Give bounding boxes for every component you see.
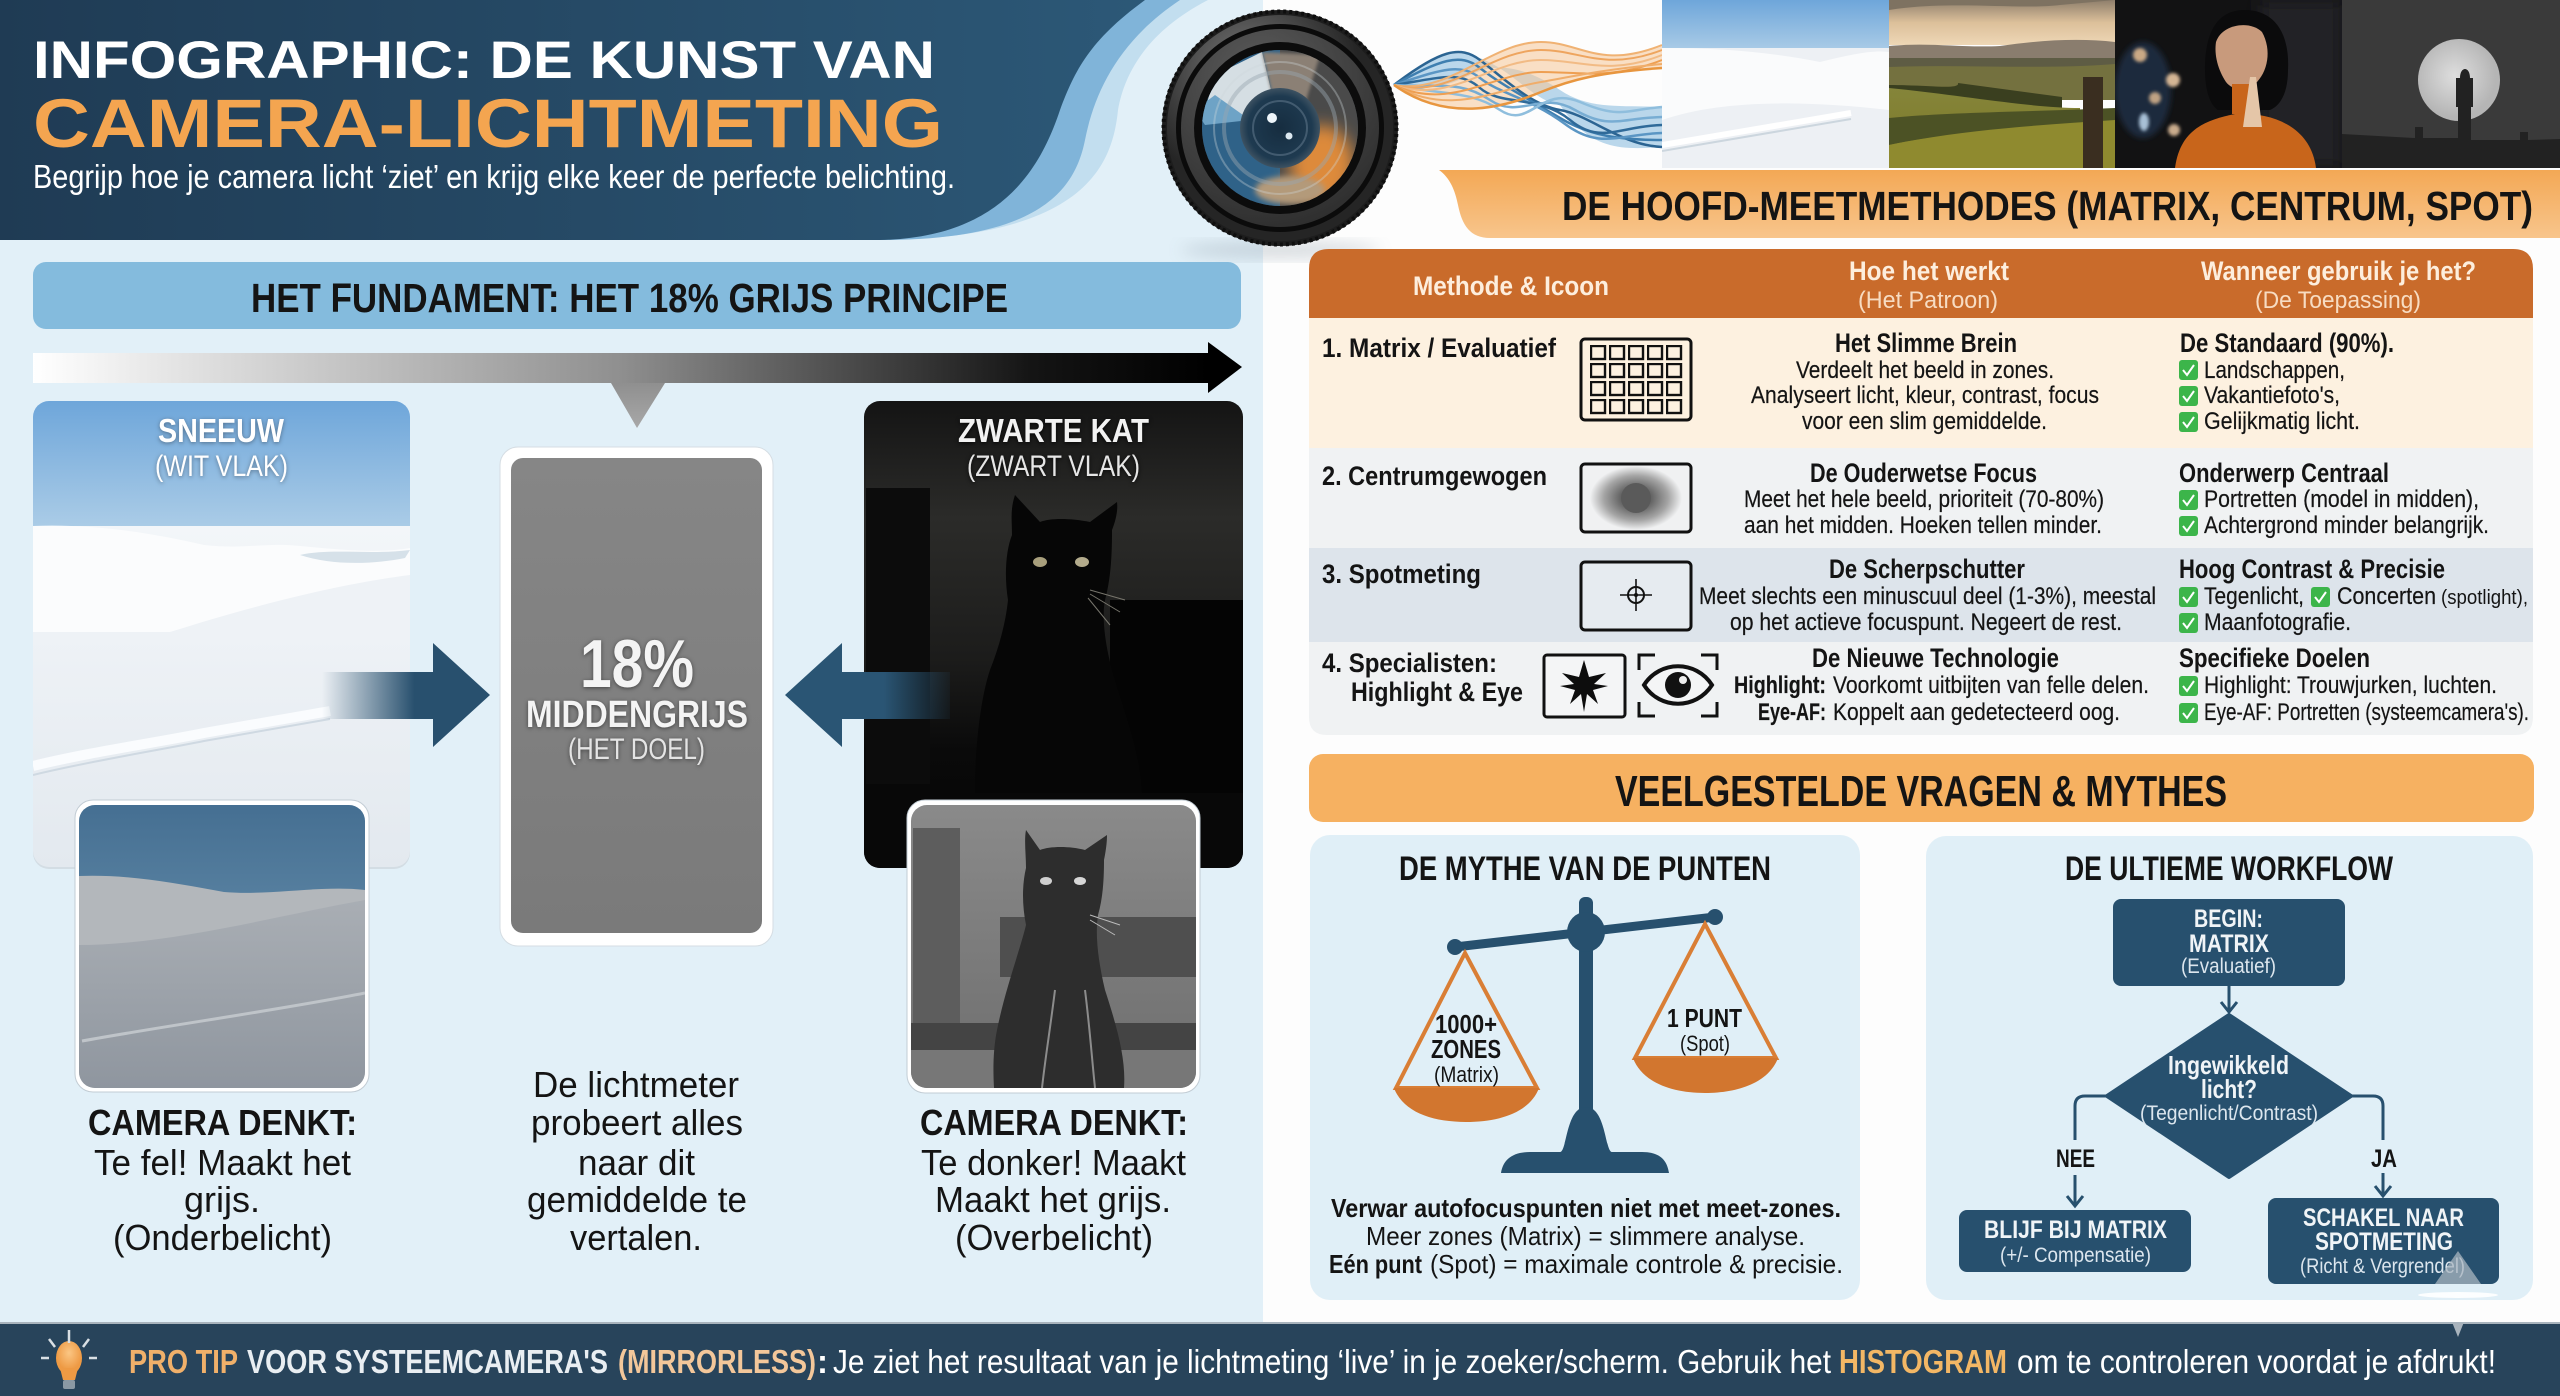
title line 2: CAMERA-LICHTMETING [33, 85, 943, 162]
panel: 18% middengrijs: MIDDENGRIJS [526, 694, 748, 736]
title line 1: INFOGRAPHIC: DE KUNST VAN [33, 31, 935, 90]
text block: camera denkt te donker: Te donker! Maakt [921, 1142, 1186, 1183]
text block: camera denkt te donker: (Overbelicht) [955, 1217, 1153, 1258]
panel: 18% middengrijs: (HET DOEL) [568, 733, 705, 766]
label: zwarte kat [958, 412, 1149, 483]
icon: matrix grid [1581, 339, 1691, 420]
row: specialisten: Voorkomt uitbijten van felle delen. [1833, 672, 2149, 699]
footer: pro tip: Je ziet het resultaat van je lichtmeting ‘live’ in je zoeker/scherm. Gebruik het [833, 1343, 1831, 1380]
arrow: begin to question [2221, 986, 2237, 1012]
chart: balance scale [1394, 897, 1778, 1173]
row: centrumgewogen [1309, 448, 2533, 548]
photo: snow [33, 401, 410, 867]
photo: snow landscape [1662, 0, 1889, 168]
text block: camera denkt te fel: CAMERA DENKT: [88, 1102, 357, 1143]
row: matrix: Verdeelt het beeld in zones. [1796, 357, 2054, 384]
panel: mythe van de punten: Eén punt [1329, 1249, 1422, 1279]
flow box: begin: MATRIX [2189, 930, 2269, 958]
panel: mythe van de punten: (Spot) = maximale controle & precisie. [1430, 1249, 1843, 1279]
left pan [1394, 953, 1539, 1122]
heading: hoofd-meetmethodes [1439, 170, 2560, 238]
row: specialisten: Highlight & Eye [1351, 677, 1523, 707]
title [33, 31, 955, 195]
flow box: schakel naar spotmeting: SCHAKEL NAAR [2303, 1204, 2464, 1232]
arrow: nee branch: NEE [2056, 1145, 2095, 1173]
flow decision: ingewikkeld licht: (Tegenlicht/Contrast) [2140, 1102, 2318, 1125]
row: specialisten: Highlight: Trouwjurken, luchten. [2204, 672, 2497, 699]
text block: lichtmeter [527, 1064, 747, 1258]
footer: pro tip: HISTOGRAM [1839, 1343, 2007, 1380]
icon: check [2179, 412, 2198, 432]
row: specialisten: Highlight: [1734, 672, 1826, 699]
table header: Wanneer gebruik je het? [2201, 256, 2476, 286]
row: specialisten: Eye-AF: [1758, 699, 1826, 726]
row: spotmeting: 3. Spotmeting [1322, 559, 1481, 589]
table header: (De Toepassing) [2255, 287, 2421, 314]
arrow: ja branch [2351, 1096, 2397, 1196]
panel: mythe van de punten: Verwar autofocuspunten niet met meet-zones. [1331, 1193, 1841, 1223]
text block: camera denkt te fel: Te fel! Maakt het [94, 1142, 351, 1183]
row: matrix: De Standaard (90%). [2180, 328, 2394, 358]
icon: check [2179, 386, 2198, 406]
row: spotmeting: Tegenlicht, [2204, 583, 2304, 610]
text block: camera denkt te donker: Maakt het grijs. [935, 1179, 1171, 1220]
flow decision: ingewikkeld licht: Ingewikkeld [2168, 1050, 2289, 1080]
footer: pro tip: : [817, 1343, 828, 1380]
panel: method table [1309, 249, 2533, 735]
footer: pro tip: (MIRRORLESS) [618, 1343, 816, 1380]
label: sneeuw: (WIT VLAK) [155, 450, 288, 483]
icon: check [2179, 613, 2198, 633]
flow decision: ingewikkeld licht: licht? [2201, 1074, 2257, 1104]
photo: moon silhouette [2342, 0, 2560, 168]
text block: lichtmeter: naar dit [578, 1142, 695, 1183]
row: spotmeting: De Scherpschutter [1829, 554, 2025, 584]
text block: camera denkt te fel: (Onderbelicht) [113, 1217, 332, 1258]
heading: 18% grijs principe [33, 262, 1241, 329]
text block: camera denkt te fel: grijs. [184, 1179, 260, 1220]
label: sneeuw [155, 412, 288, 483]
photo strip [1662, 0, 2560, 168]
heading: veelgestelde vragen [1309, 754, 2534, 822]
text block: camera denkt te donker [920, 1102, 1188, 1258]
row: spotmeting: (spotlight), [2441, 587, 2528, 609]
row: spotmeting: Meet slechts een minuscuul deel (1-3%), meestal [1699, 583, 2156, 610]
row: centrumgewogen: aan het midden. Hoeken tellen minder. [1744, 512, 2102, 539]
left pan: (Matrix) [1434, 1062, 1499, 1087]
label: zwarte kat: (ZWART VLAK) [967, 450, 1140, 483]
icon: check [2179, 490, 2198, 510]
panel: mythe van de punten [1310, 835, 1860, 1300]
footer: pro tip: VOOR SYSTEEMCAMERA'S [247, 1343, 608, 1380]
row: matrix: Het Slimme Brein [1835, 328, 2017, 358]
footer: pro tip [0, 1322, 2560, 1396]
arrow: ja branch: JA [2371, 1145, 2397, 1173]
flow box: blijf bij matrix: (+/- Compensatie) [2000, 1244, 2151, 1267]
icon: camera lens [1162, 10, 1398, 257]
table header: Hoe het werkt [1849, 256, 2009, 286]
row: spotmeting: Concerten [2337, 583, 2436, 610]
icon: check [2179, 516, 2198, 536]
table header: Methode & Icoon [1413, 271, 1609, 301]
icon: spot crosshair [1581, 562, 1691, 630]
photo: portrait woman [2115, 0, 2342, 168]
light wave ribbons [1394, 42, 1662, 148]
row: matrix: voor een slim gemiddelde. [1802, 408, 2047, 435]
row: specialisten: Specifieke Doelen [2179, 643, 2370, 673]
table header [1309, 249, 2533, 318]
left pan: ZONES [1431, 1034, 1501, 1064]
row: matrix: Vakantiefoto's, [2204, 382, 2340, 409]
flow box: schakel naar spotmeting [2268, 1198, 2499, 1298]
row: centrumgewogen: De Ouderwetse Focus [1810, 458, 2037, 488]
arrow: white to black gradient scale [33, 342, 1242, 428]
row: spotmeting: Maanfotografie. [2204, 609, 2351, 636]
icon: light bulb [41, 1330, 97, 1389]
icon: center weighted [1581, 464, 1691, 532]
row: specialisten: De Nieuwe Technologie [1812, 643, 2059, 673]
icon: highlight star [1544, 655, 1625, 717]
text block: camera denkt te donker: CAMERA DENKT: [920, 1102, 1188, 1143]
text block: camera denkt te fel [88, 1102, 357, 1258]
arrow: snow to grey [322, 643, 490, 747]
row: specialisten: 4. Specialisten: [1322, 648, 1497, 678]
row: centrumgewogen: 2. Centrumgewogen [1322, 461, 1547, 491]
photo inset: cat as camera sees it [907, 800, 1200, 1093]
text block: lichtmeter: gemiddelde te [527, 1179, 747, 1220]
label: sneeuw: SNEEUW [158, 412, 285, 449]
photo: black cat [864, 401, 1243, 868]
icon: eye focus [1639, 655, 1717, 716]
row: matrix: Gelijkmatig licht. [2204, 408, 2360, 435]
icon: check [2179, 587, 2198, 607]
right pan [1633, 924, 1778, 1093]
panel: ultieme workflow: DE ULTIEME WORKFLOW [2065, 850, 2394, 888]
photo inset: snow as camera sees it [75, 800, 369, 1092]
heading: veelgestelde vragen: VEELGESTELDE VRAGEN & MYTHES [1615, 767, 2227, 816]
table header: (Het Patroon) [1858, 287, 1998, 314]
row: specialisten: Koppelt aan gedetecteerd oog. [1833, 699, 2120, 726]
header band with waves [0, 0, 1208, 240]
row: spotmeting [1309, 548, 2533, 642]
row: matrix: 1. Matrix / Evaluatief [1322, 333, 1557, 363]
row: centrumgewogen: Meet het hele beeld, prioriteit (70-80%) [1744, 486, 2104, 513]
flow box: schakel naar spotmeting: (Richt & Vergrendel) [2300, 1255, 2465, 1278]
icon: check [2311, 587, 2330, 607]
row: centrumgewogen: Achtergrond minder belangrijk. [2204, 512, 2489, 539]
photo: green hills at sunset [1889, 0, 2115, 168]
icon: check [2179, 360, 2198, 380]
row: spotmeting: Hoog Contrast & Precisie [2179, 554, 2445, 584]
arrow: cat to grey [785, 643, 950, 747]
subtitle: Begrijp hoe je camera licht ‘ziet’ en krijg elke keer de perfecte belichting. [33, 158, 955, 195]
panel: zwarte kat [864, 401, 1243, 868]
row: spotmeting: op het actieve focuspunt. Negeert de rest. [1730, 609, 2122, 636]
flow box: schakel naar spotmeting: SPOTMETING [2315, 1228, 2453, 1256]
row: centrumgewogen: Portretten (model in midden), [2204, 486, 2479, 513]
flow box: blijf bij matrix [1959, 1210, 2191, 1272]
row: specialisten [1309, 642, 2533, 735]
flow box: begin [2113, 899, 2345, 986]
row: centrumgewogen: Onderwerp Centraal [2179, 458, 2389, 488]
panel: mythe van de punten: Meer zones (Matrix) = slimmere analyse. [1366, 1221, 1805, 1251]
icon: check [2179, 703, 2198, 723]
arrow: nee branch [2056, 1096, 2107, 1206]
footer: pro tip: PRO TIP [129, 1343, 238, 1380]
row: matrix [1309, 318, 2533, 448]
row: matrix: Analyseert licht, kleur, contrast, focus [1751, 382, 2099, 409]
flow box: begin: (Evaluatief) [2181, 955, 2276, 978]
heading: 18% grijs principe: HET FUNDAMENT: HET 18% GRIJS PRINCIPE [251, 275, 1008, 321]
label: zwarte kat: ZWARTE KAT [958, 412, 1149, 449]
panel: sneeuw [33, 401, 410, 869]
footer: pro tip: om te controleren voordat je afdrukt! [2017, 1343, 2496, 1380]
text block: lichtmeter: De lichtmeter [533, 1064, 739, 1105]
panel: 18% middengrijs [500, 447, 773, 946]
right pan: (Spot) [1680, 1031, 1730, 1056]
right pan: 1 PUNT [1667, 1003, 1742, 1033]
flow decision: ingewikkeld licht [2107, 1015, 2351, 1177]
panel: mythe van de punten: DE MYTHE VAN DE PUNTEN [1399, 850, 1771, 888]
panel: 18% middengrijs: 18% [580, 626, 694, 702]
text block: lichtmeter: vertalen. [570, 1217, 702, 1258]
flow box: blijf bij matrix: BLIJF BIJ MATRIX [1984, 1216, 2167, 1244]
row: matrix: Landschappen, [2204, 357, 2345, 384]
left pan: 1000+ [1435, 1009, 1497, 1039]
flow box: begin: BEGIN: [2194, 905, 2263, 933]
text block: lichtmeter: probeert alles [531, 1102, 743, 1143]
panel: ultieme workflow [1926, 836, 2533, 1300]
icon: check [2179, 676, 2198, 696]
